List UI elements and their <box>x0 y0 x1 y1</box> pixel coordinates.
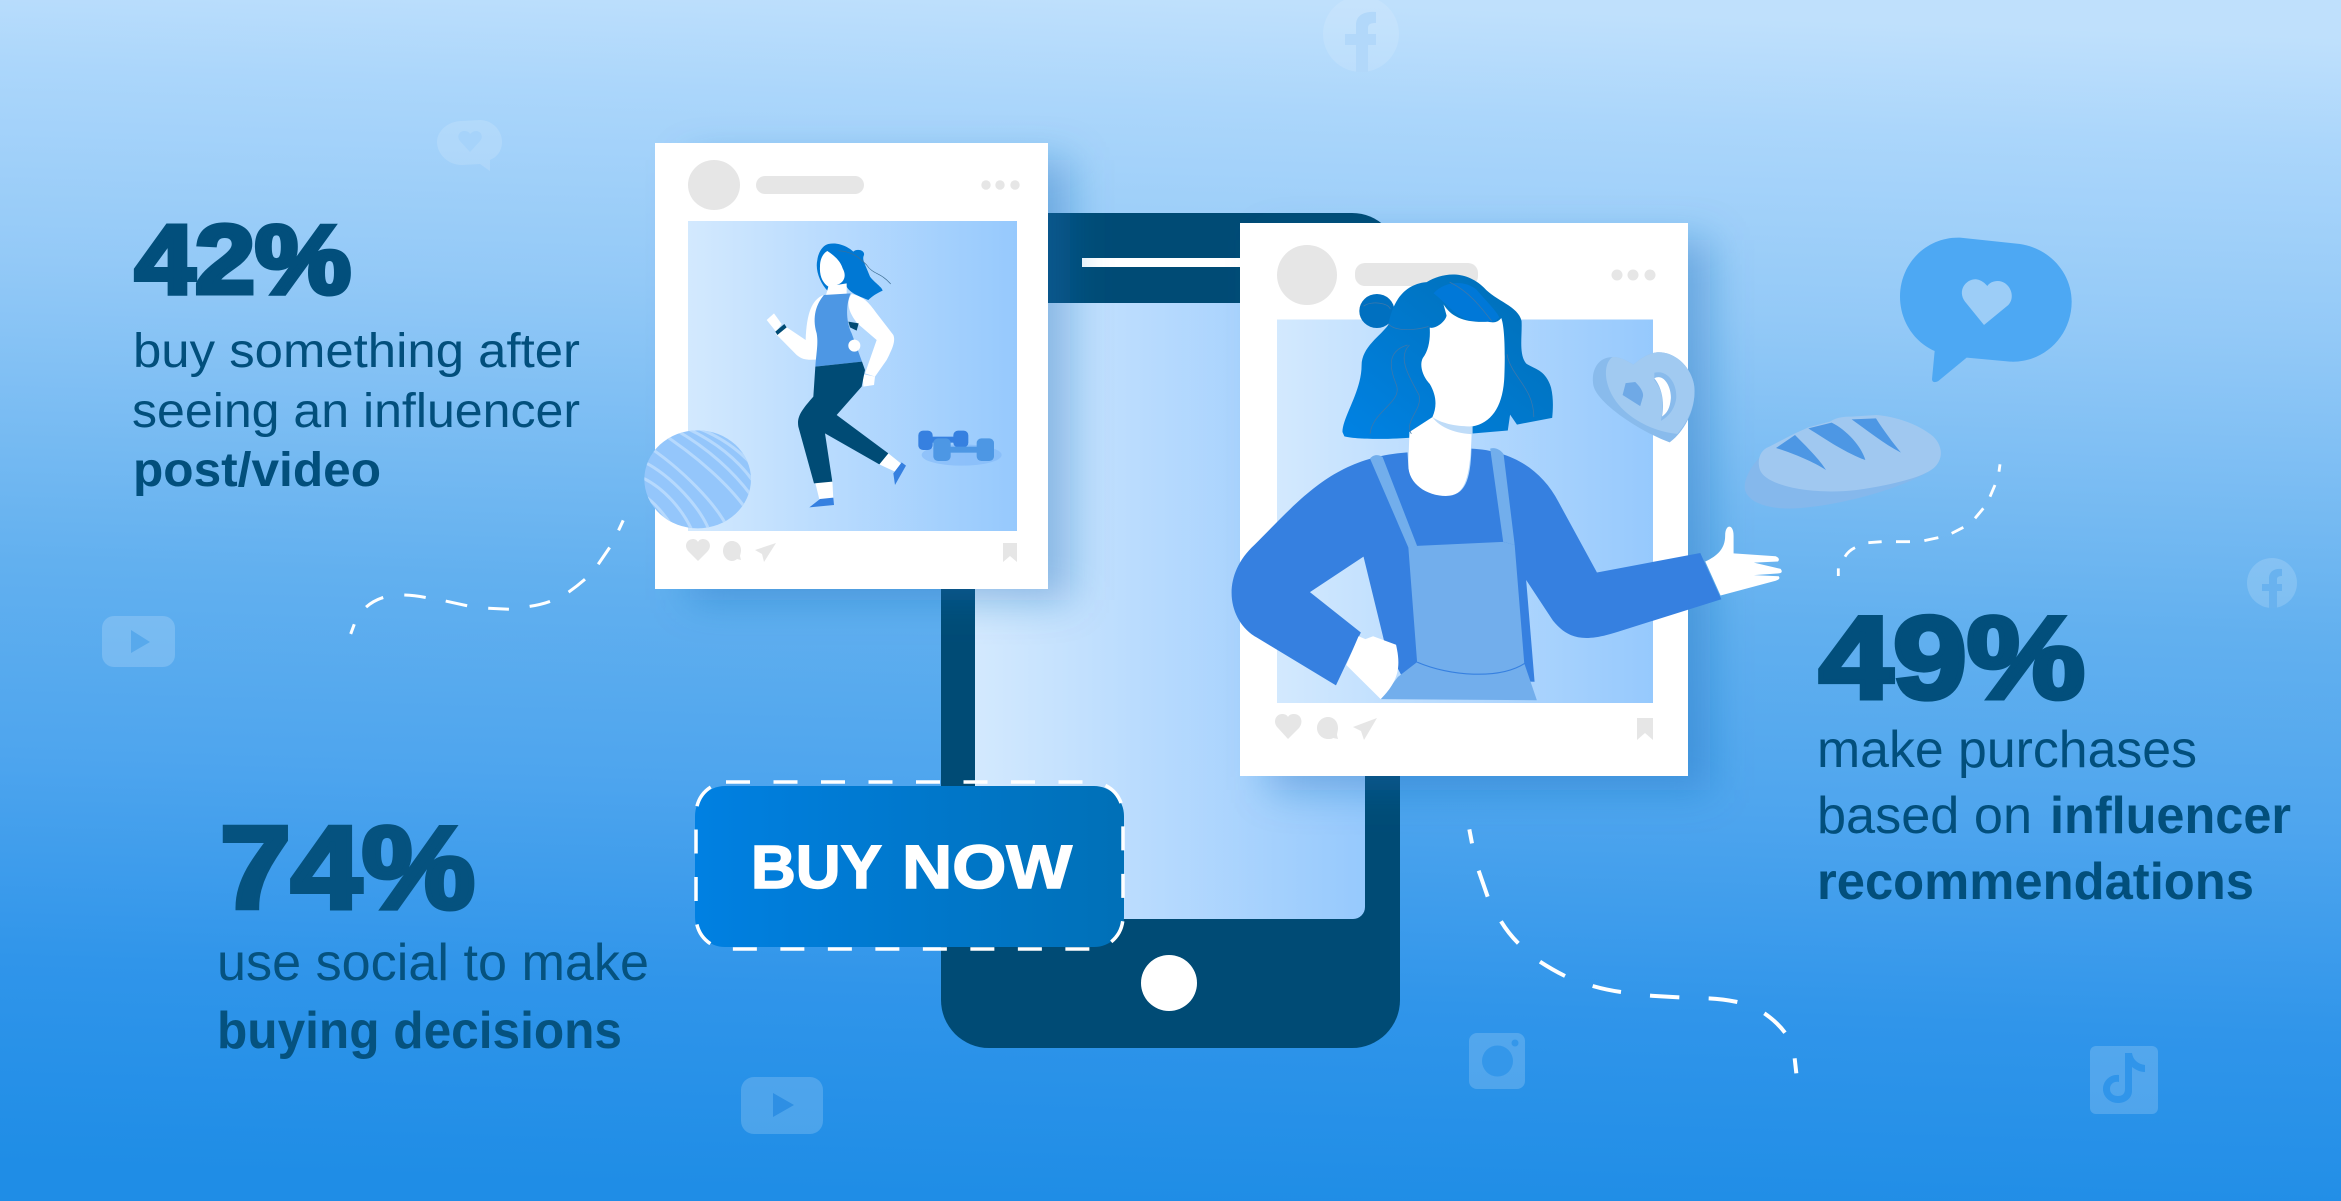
description: recommendations <box>1817 853 2254 911</box>
wristband <box>775 324 787 335</box>
exercise ball <box>644 430 751 528</box>
illustration: runner <box>767 244 1002 507</box>
dashed line left <box>351 520 623 634</box>
hand on hip <box>1346 636 1398 699</box>
dashed outline <box>696 782 1123 949</box>
neck <box>1408 417 1472 496</box>
description: seeing an influencer <box>132 385 580 438</box>
button label <box>751 833 1072 901</box>
phone home button <box>1141 955 1197 1011</box>
hair <box>1342 275 1553 439</box>
pretzel <box>1593 352 1695 442</box>
stat: 74% <box>217 802 649 1060</box>
post action icons <box>686 539 1017 562</box>
face <box>1421 304 1505 426</box>
description: buy something after <box>133 325 580 378</box>
hair bun <box>1359 294 1395 328</box>
username placeholder <box>756 176 864 194</box>
post shadow right <box>1270 240 1710 790</box>
button label: NOW <box>902 833 1072 901</box>
trousers <box>798 362 888 483</box>
number: 49% <box>1819 592 2085 723</box>
dashed line upper right <box>1838 464 2000 576</box>
fist <box>767 313 782 332</box>
description: post/video <box>133 444 381 497</box>
sweater <box>1232 449 1721 685</box>
description: use social to make <box>217 934 649 992</box>
description <box>1817 721 2291 911</box>
description <box>132 325 580 497</box>
icon: facebook top <box>1323 0 1399 72</box>
stat: 42% <box>132 205 580 497</box>
neck and face <box>820 251 847 295</box>
description: make purchases <box>1817 721 2197 779</box>
post action icons <box>1275 714 1653 740</box>
description: influencer <box>2050 787 2291 845</box>
menu dots <box>981 180 1020 190</box>
phone <box>941 213 1400 1048</box>
avatar placeholder <box>688 160 740 210</box>
hair <box>817 244 883 300</box>
dumbbells <box>918 431 1002 466</box>
icon: facebook right <box>2247 558 2297 608</box>
bread loaf <box>1745 415 1941 509</box>
right arm <box>848 294 894 377</box>
post image background <box>1277 320 1653 703</box>
button label: BUY <box>751 833 882 901</box>
description: buying decisions <box>217 1002 622 1060</box>
neck shadow <box>1432 417 1473 434</box>
stat: 49% <box>1817 592 2291 911</box>
icon: small speech bubble top left <box>437 120 502 171</box>
sports bra detail <box>848 322 859 331</box>
hair strands <box>1364 282 1534 434</box>
avatar placeholder <box>1277 245 1337 305</box>
phone screen <box>975 303 1365 919</box>
post image background <box>688 221 1017 531</box>
buy now button <box>695 782 1124 949</box>
apron <box>1381 542 1537 700</box>
tank top <box>815 293 862 367</box>
hair fringe highlight <box>1434 283 1499 322</box>
description <box>217 934 649 1060</box>
icon: youtube bottom <box>741 1077 823 1134</box>
menu dots <box>1612 270 1656 280</box>
dashed line lower right <box>1469 829 1796 1073</box>
hand <box>863 374 875 387</box>
post: baker woman <box>1240 223 1688 776</box>
illustration: woman <box>1232 275 1782 700</box>
post: runner <box>655 143 1048 589</box>
icon: tiktok <box>2090 1046 2158 1114</box>
number: 42% <box>135 205 351 314</box>
speech bubble with heart <box>1900 238 2072 382</box>
phone speaker bar <box>1082 258 1282 267</box>
description: based on <box>1817 787 2032 845</box>
icon: instagram <box>1469 1033 1525 1089</box>
username placeholder <box>1355 263 1478 286</box>
pretzel holes <box>1654 372 1676 421</box>
icon: youtube left <box>102 616 175 667</box>
apron straps <box>1370 448 1515 547</box>
outstretched hand <box>1705 527 1782 595</box>
post shadow left <box>690 160 1070 600</box>
apron waist line <box>1417 662 1525 674</box>
left arm <box>775 295 823 360</box>
number: 74% <box>220 802 475 933</box>
shoes <box>809 462 906 507</box>
socks <box>815 453 902 499</box>
